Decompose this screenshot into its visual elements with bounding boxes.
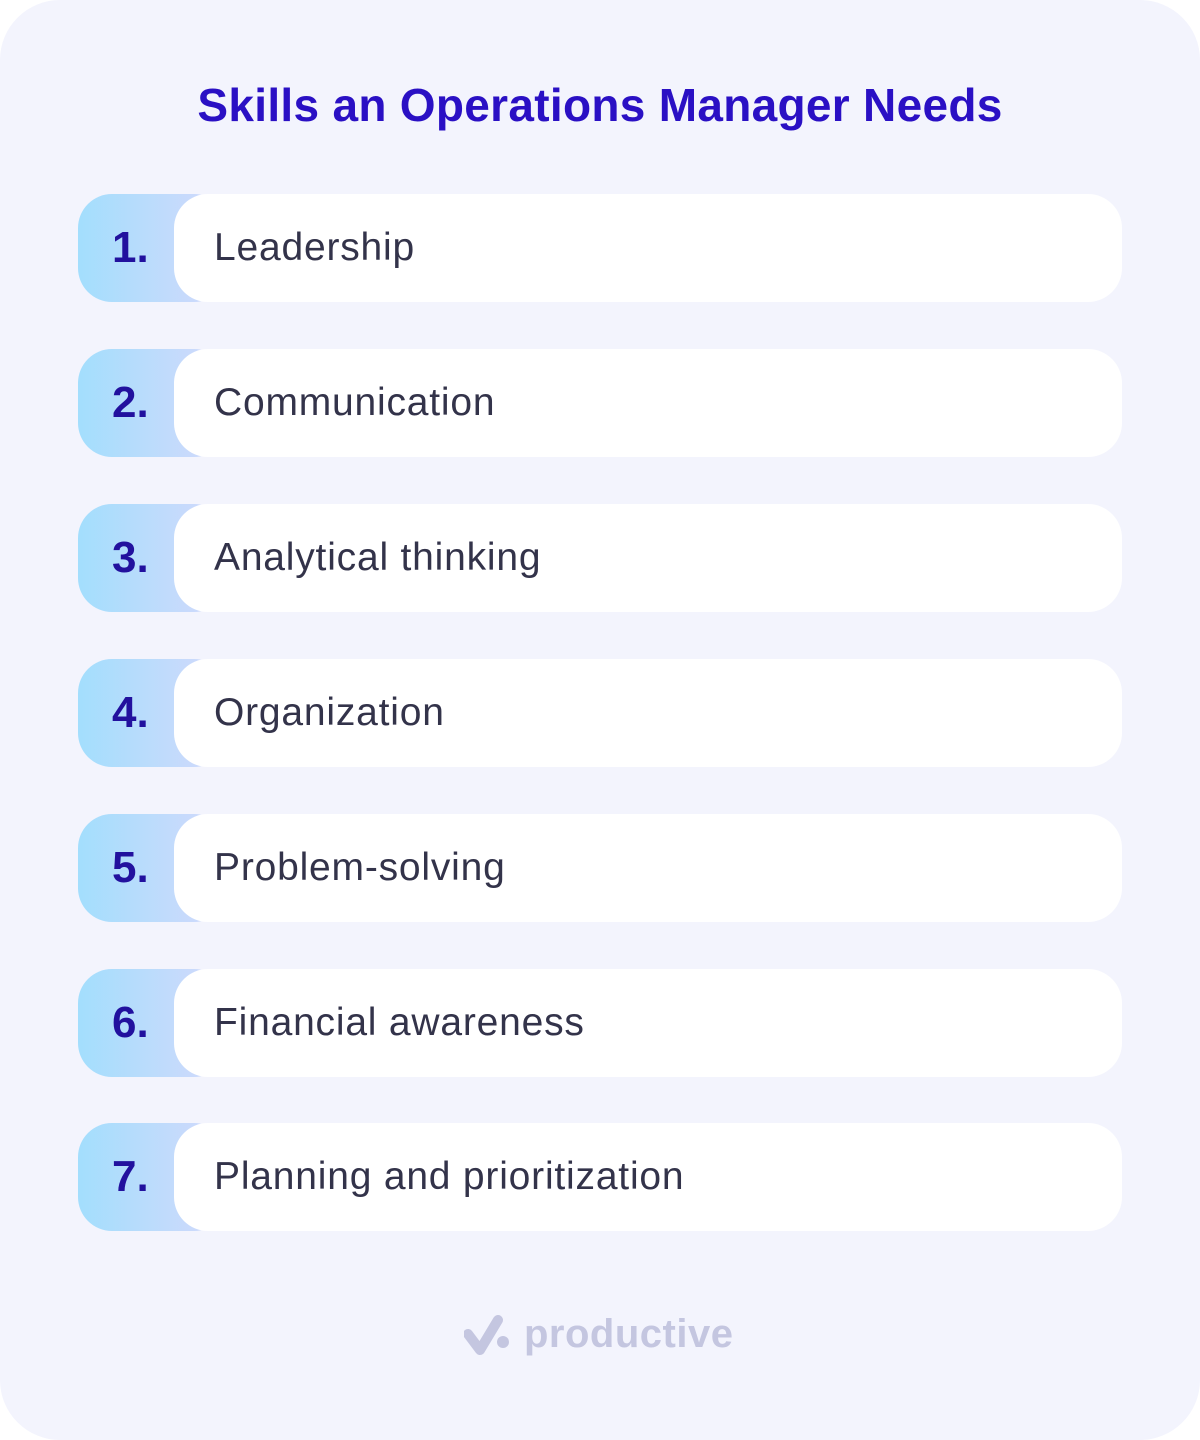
item 3: 3. bbox=[112, 533, 149, 582]
item 7: 7. bbox=[112, 1152, 149, 1201]
item 1: Leadership bbox=[214, 226, 415, 269]
title: Skills an Operations Manager Needs bbox=[197, 79, 1003, 131]
item 5: 5. bbox=[112, 843, 149, 892]
item 3: Analytical thinking bbox=[214, 536, 541, 579]
item 6 bbox=[78, 969, 1122, 1077]
item 1: 1. bbox=[112, 223, 149, 272]
item 4: Organization bbox=[214, 691, 445, 734]
item 2: 2. bbox=[112, 378, 149, 427]
item 5 bbox=[78, 814, 1122, 922]
item 7: Planning and prioritization bbox=[214, 1155, 684, 1198]
item 7 bbox=[78, 1123, 1122, 1231]
item 3 bbox=[78, 504, 1122, 612]
item 4: 4. bbox=[112, 688, 149, 737]
item 6: 6. bbox=[112, 998, 149, 1047]
item 5: Problem-solving bbox=[214, 846, 506, 889]
item 6: Financial awareness bbox=[214, 1001, 585, 1044]
item 2: Communication bbox=[214, 381, 495, 424]
item 4 bbox=[78, 659, 1122, 767]
item 1 bbox=[78, 194, 1122, 302]
logo: productive: productive bbox=[524, 1312, 733, 1356]
item 2 bbox=[78, 349, 1122, 457]
